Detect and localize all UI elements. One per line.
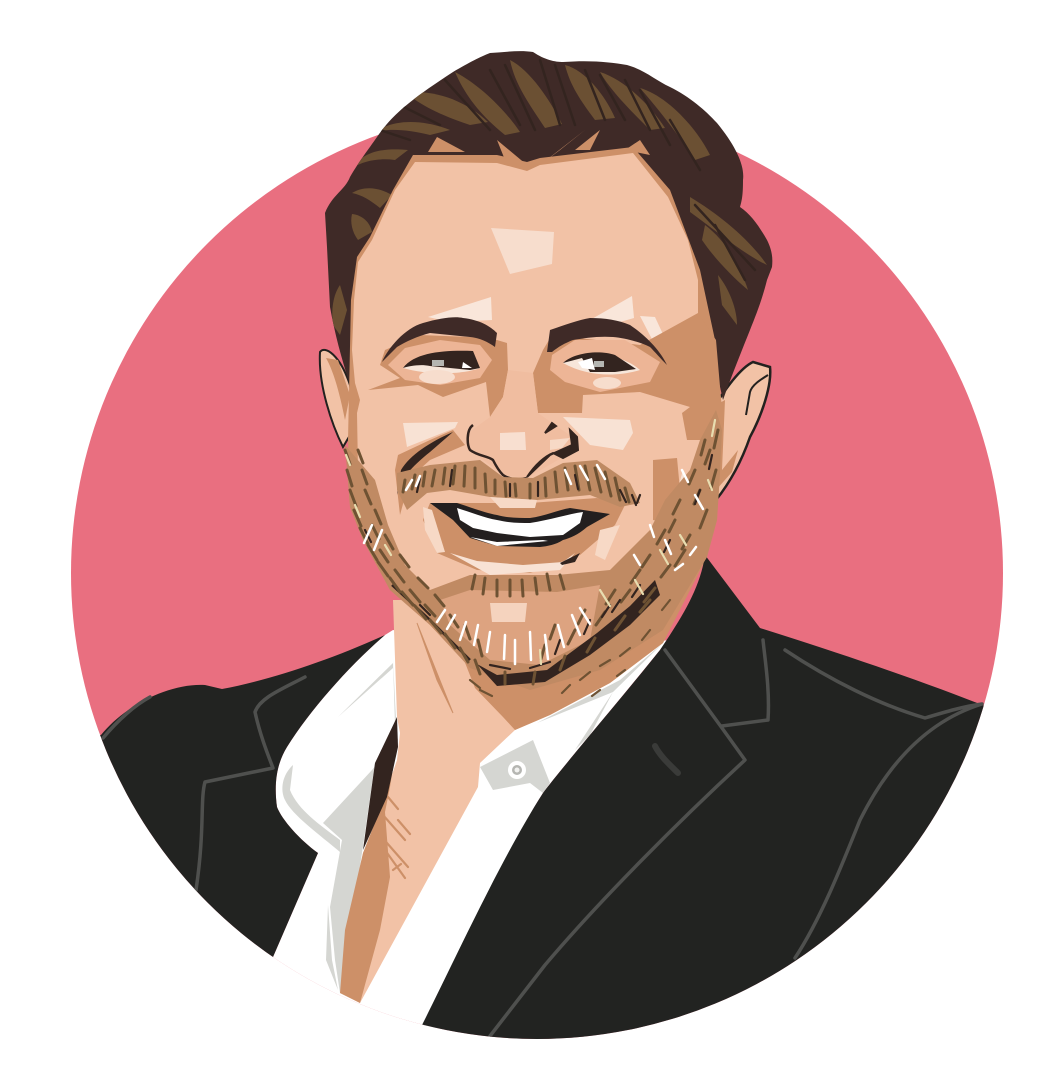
stubble cream [346,420,715,664]
mouth area shading [423,498,625,573]
stubble brown [345,430,718,684]
lip shadow mark [560,553,580,565]
chest and neck skin [340,600,664,1003]
chest shadow [340,738,398,1003]
forehead highlight [491,228,554,274]
collar tab with button [480,740,550,793]
hair silhouette [325,51,772,400]
right ear [715,362,770,500]
neck crease line [417,623,453,713]
mouth [430,503,610,547]
chest hatching [380,797,410,878]
right eyebrow [547,318,667,365]
pink background circle [71,107,1003,1039]
neck stubble below beard [470,600,670,696]
clothing [80,555,990,1050]
moustache [397,460,640,510]
stubble white [364,465,703,664]
cheek highlights [403,417,633,450]
left eye socket and shadow [368,335,508,417]
jacket seams [103,640,982,1036]
temple and nose side shadow [533,313,722,440]
left eye [403,351,480,384]
stubble dark [365,455,712,669]
jacket right side [422,555,990,1050]
nasolabial shading [395,430,690,540]
face light skin [352,153,712,615]
nose [468,370,578,479]
white shirt [260,630,668,1050]
dark shirt opening [363,717,398,850]
left ear [320,350,356,447]
brow highlights [428,296,668,345]
left eyebrow [382,317,497,362]
jacket left side [80,635,385,957]
right eye socket [550,340,660,392]
neck shadow under beard [460,557,707,730]
face base shadow [348,147,722,690]
hairline wisps [428,130,650,165]
hair highlights [332,60,767,335]
shirt shadows [282,643,663,993]
right eye [563,352,640,389]
upper lip highlight [490,497,537,508]
beard dark underside [477,580,660,686]
hair dark strands [380,60,755,280]
chin base [440,585,600,665]
soul patch [490,603,527,622]
beard base [345,410,722,690]
left jaw line [392,585,470,660]
